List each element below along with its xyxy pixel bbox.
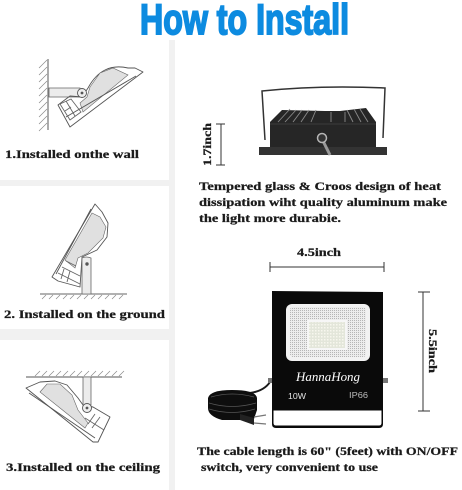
text block: tempered glass description	[199, 181, 447, 225]
icon: cable coil and plug	[208, 382, 270, 425]
text block: tempered glass description: dissipation wiht quality aluminum make	[199, 197, 447, 209]
icon: cable gland and cable	[318, 134, 330, 155]
dimension: depth	[202, 122, 225, 166]
icon: lamp mounted on ground	[40, 204, 127, 299]
label: installed on the ground: 2. Installed on the ground	[4, 309, 166, 321]
text block: tempered glass description: Tempered glass & Croos design of heat	[199, 181, 441, 193]
icon: side brackets	[268, 378, 388, 383]
text block: tempered glass description: the light more durabie.	[199, 213, 341, 225]
wattage label: 10W	[288, 391, 306, 401]
panel: wall installation	[5, 59, 143, 161]
dimension: depth: 1.7inch	[202, 122, 214, 166]
IP rating label: IP66	[349, 391, 369, 400]
icon: reflector panel	[286, 304, 370, 361]
text block: cable length	[197, 446, 458, 474]
text block: cable length: switch, very convenient to use	[201, 462, 378, 474]
icon: lamp mounted on ceiling	[26, 371, 124, 442]
dimension: height: 5.5inch	[426, 329, 438, 374]
icon: mounting bracket	[262, 87, 385, 140]
dimension: width	[270, 247, 384, 272]
icon: heat sink fins	[270, 108, 376, 148]
icon: lamp mounted on wall	[39, 59, 143, 131]
text block: cable length: The cable length is 60" (5feet) with ON/OFF	[197, 446, 458, 458]
panel: front view of the floodlight	[208, 291, 388, 428]
panel: ground installation	[4, 204, 166, 321]
dimension: width: 4.5inch	[297, 247, 342, 259]
label: installed on the wall: 1.Installed onthe wall	[5, 149, 139, 161]
panel: ceiling installation	[6, 371, 160, 474]
panel: rear view of the floodlight	[202, 87, 387, 166]
icon: lamp housing	[272, 291, 383, 428]
dimension: height	[418, 292, 438, 411]
icon: front plate	[259, 147, 387, 155]
label: installed on the ceiling: 3.Installed on the ceiling	[6, 462, 160, 474]
brand name: HannaHong	[295, 370, 360, 384]
icon: white lower strip	[274, 410, 382, 426]
